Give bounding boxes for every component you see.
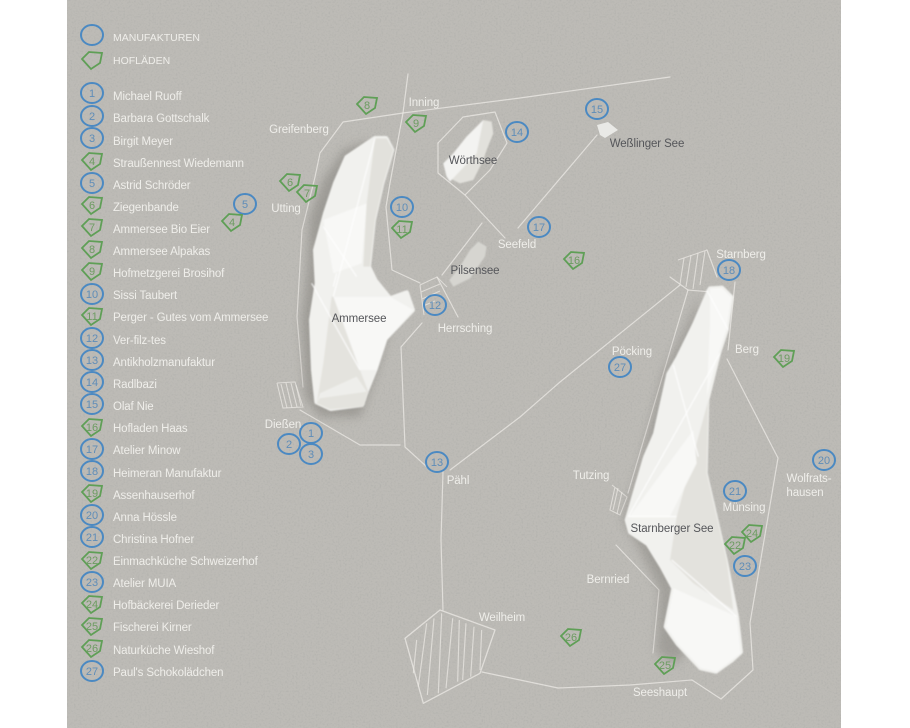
map markers: Manufakturen bbox=[234, 99, 835, 576]
legend: numbered list: 15 bbox=[86, 399, 98, 411]
lake labels: Wörthsee bbox=[449, 155, 497, 167]
legend: numbered list: 12 bbox=[86, 333, 98, 345]
legend: numbered list: 8 bbox=[89, 244, 95, 256]
legend: numbered list: 18 bbox=[86, 466, 98, 478]
lake: Wörthsee bbox=[443, 120, 493, 183]
legend: numbered list: 1 bbox=[89, 88, 95, 100]
place labels: Seefeld bbox=[498, 239, 536, 251]
place labels: Pöcking bbox=[612, 346, 652, 358]
legend: numbered list: Ammersee Bio Eier bbox=[113, 224, 210, 236]
lake labels: Weßlinger See bbox=[610, 138, 684, 150]
lake: Starnberger See bbox=[623, 288, 741, 672]
map markers: Hofläden: 11 bbox=[396, 224, 408, 236]
map markers: Manufakturen: 12 bbox=[429, 300, 441, 312]
legend: numbered list: Einmachküche Schweizerhof bbox=[113, 556, 259, 568]
legend: numbered list: 4 bbox=[89, 156, 95, 168]
legend: numbered list: 7 bbox=[89, 222, 95, 234]
legend: numbered list: 24 bbox=[86, 599, 98, 611]
legend: numbered list: 3 bbox=[89, 133, 95, 145]
legend: numbered list: Hofladen Haas bbox=[113, 423, 188, 435]
place labels: Münsing bbox=[723, 502, 765, 514]
legend: numbered list: Naturküche Wieshof bbox=[113, 645, 215, 657]
map markers: Hofläden: 19 bbox=[778, 353, 790, 365]
legend: numbered list: Ziegenbande bbox=[113, 202, 179, 214]
legend: numbered list: 5 bbox=[89, 178, 95, 190]
place labels: Inning bbox=[409, 97, 439, 109]
map markers: Manufakturen: 20 bbox=[818, 455, 830, 467]
map markers: Manufakturen: 27 bbox=[614, 362, 626, 374]
legend: numbered list: Radlbazi bbox=[113, 379, 157, 391]
map markers: Hofläden: 25 bbox=[659, 660, 671, 672]
hatched town: Herrsching bbox=[420, 277, 447, 315]
lake: Weßlinger See bbox=[597, 122, 618, 138]
legend: numbered list: Hofmetzgerei Brosihof bbox=[113, 268, 225, 280]
legend: numbered list: Olaf Nie bbox=[113, 401, 154, 413]
legend: marker types: MANUFAKTUREN bbox=[113, 32, 200, 44]
place labels: Herrsching bbox=[438, 323, 492, 335]
place labels: Utting bbox=[271, 203, 301, 215]
map markers: Manufakturen: 10 bbox=[396, 202, 408, 214]
place labels: Bernried bbox=[587, 574, 629, 586]
legend: numbered list: Assenhauserhof bbox=[113, 490, 195, 502]
map markers: Manufakturen: 1 bbox=[308, 428, 314, 440]
legend: numbered list: 17 bbox=[86, 444, 98, 456]
legend: numbered list: 20 bbox=[86, 510, 98, 522]
map markers: Hofläden bbox=[222, 97, 794, 674]
map markers: Hofläden: 8 bbox=[364, 100, 370, 112]
map markers: Hofläden: 16 bbox=[568, 255, 580, 267]
legend: numbered list: Birgit Meyer bbox=[113, 136, 173, 148]
place labels: hausen bbox=[786, 487, 824, 499]
map markers: Hofläden: 6 bbox=[287, 177, 293, 189]
legend: numbered list: Ammersee Alpakas bbox=[113, 246, 211, 258]
map markers: Hofläden: 22 bbox=[729, 540, 741, 552]
place labels: Pähl bbox=[447, 475, 469, 487]
legend: numbered list: 9 bbox=[89, 266, 95, 278]
legend: numbered list: 26 bbox=[86, 643, 98, 655]
legend: numbered list: 13 bbox=[86, 355, 98, 367]
road sketch lines bbox=[297, 74, 778, 699]
map markers: Manufakturen: 5 bbox=[242, 199, 248, 211]
place labels: Wolfrats- bbox=[787, 473, 832, 485]
legend: numbered list: Straußennest Wiedemann bbox=[113, 158, 244, 170]
legend: numbered list: Michael Ruoff bbox=[113, 91, 182, 103]
lake labels: Pilsensee bbox=[451, 265, 499, 277]
map markers: Manufakturen: 3 bbox=[308, 449, 314, 461]
legend: numbered list: Sissi Taubert bbox=[113, 290, 178, 302]
legend: numbered list: Heimeran Manufaktur bbox=[113, 468, 222, 480]
map markers: Hofläden: 24 bbox=[746, 528, 758, 540]
place labels: Starnberg bbox=[716, 249, 766, 261]
legend: numbered list: 21 bbox=[86, 532, 98, 544]
legend: numbered list: 10 bbox=[86, 289, 98, 301]
map markers: Manufakturen: 15 bbox=[591, 104, 603, 116]
place labels: Greifenberg bbox=[269, 124, 329, 136]
legend: numbered list: 19 bbox=[86, 488, 98, 500]
map markers: Manufakturen: 2 bbox=[286, 439, 292, 451]
hatched town: Tutzing bbox=[610, 485, 627, 515]
legend: numbered list: Paul's Schokolädchen bbox=[113, 667, 223, 679]
lake labels bbox=[332, 138, 713, 535]
legend: numbered list: 23 bbox=[86, 577, 98, 589]
hatched town: Starnberg bbox=[678, 250, 707, 289]
hatched town: Weilheim bbox=[405, 610, 495, 703]
legend: numbered list: Anna Hössle bbox=[113, 512, 177, 524]
legend: numbered list: Perger - Gutes vom Ammersee bbox=[113, 312, 268, 324]
legend: numbered list: Barbara Gottschalk bbox=[113, 113, 210, 125]
map markers: Manufakturen: 23 bbox=[739, 561, 751, 573]
legend: numbered list: Atelier MUIA bbox=[113, 578, 177, 590]
map markers: Hofläden: 4 bbox=[229, 217, 235, 229]
map markers: Hofläden: 26 bbox=[565, 632, 577, 644]
place labels: Dießen bbox=[265, 419, 301, 431]
legend: numbered list: 25 bbox=[86, 621, 98, 633]
legend: numbered list: Ver-filz-tes bbox=[113, 335, 166, 347]
legend: numbered list: Christina Hofner bbox=[113, 534, 194, 546]
map markers: Manufakturen: 21 bbox=[729, 486, 741, 498]
lake: Ammersee bbox=[302, 138, 413, 417]
place labels bbox=[265, 97, 832, 699]
map markers: Manufakturen: 14 bbox=[511, 127, 523, 139]
legend: numbered list: 16 bbox=[86, 422, 98, 434]
legend: marker types: HOFLÄDEN bbox=[113, 55, 170, 67]
legend: numbered list: Fischerei Kirner bbox=[113, 622, 192, 634]
legend: numbered list: Atelier Minow bbox=[113, 445, 181, 457]
legend: numbered list bbox=[81, 83, 268, 681]
place labels: Berg bbox=[735, 344, 759, 356]
hatched town: Dießen bbox=[277, 382, 303, 408]
legend: numbered list: 2 bbox=[89, 111, 95, 123]
legend: marker types bbox=[81, 25, 200, 69]
map markers: Manufakturen: 18 bbox=[723, 265, 735, 277]
place labels: Seeshaupt bbox=[633, 687, 688, 699]
place labels: Weilheim bbox=[479, 612, 525, 624]
legend: numbered list: 27 bbox=[86, 666, 98, 678]
lake: Pilsensee bbox=[449, 242, 487, 287]
place labels: Tutzing bbox=[573, 470, 609, 482]
map markers: Manufakturen: 17 bbox=[533, 222, 545, 234]
lake labels: Ammersee bbox=[332, 313, 386, 325]
legend: numbered list: Astrid Schröder bbox=[113, 180, 191, 192]
legend: numbered list: 22 bbox=[86, 555, 98, 567]
legend: numbered list: 14 bbox=[86, 377, 98, 389]
legend: numbered list: Hofbäckerei Derieder bbox=[113, 600, 220, 612]
map markers: Hofläden: 7 bbox=[304, 188, 310, 200]
legend: numbered list: 6 bbox=[89, 200, 95, 212]
lake labels: Starnberger See bbox=[631, 523, 713, 535]
legend: numbered list: Antikholzmanufaktur bbox=[113, 357, 215, 369]
legend: numbered list: 11 bbox=[86, 311, 98, 323]
map markers: Manufakturen: 13 bbox=[431, 457, 443, 469]
map markers: Hofläden: 9 bbox=[413, 118, 419, 130]
